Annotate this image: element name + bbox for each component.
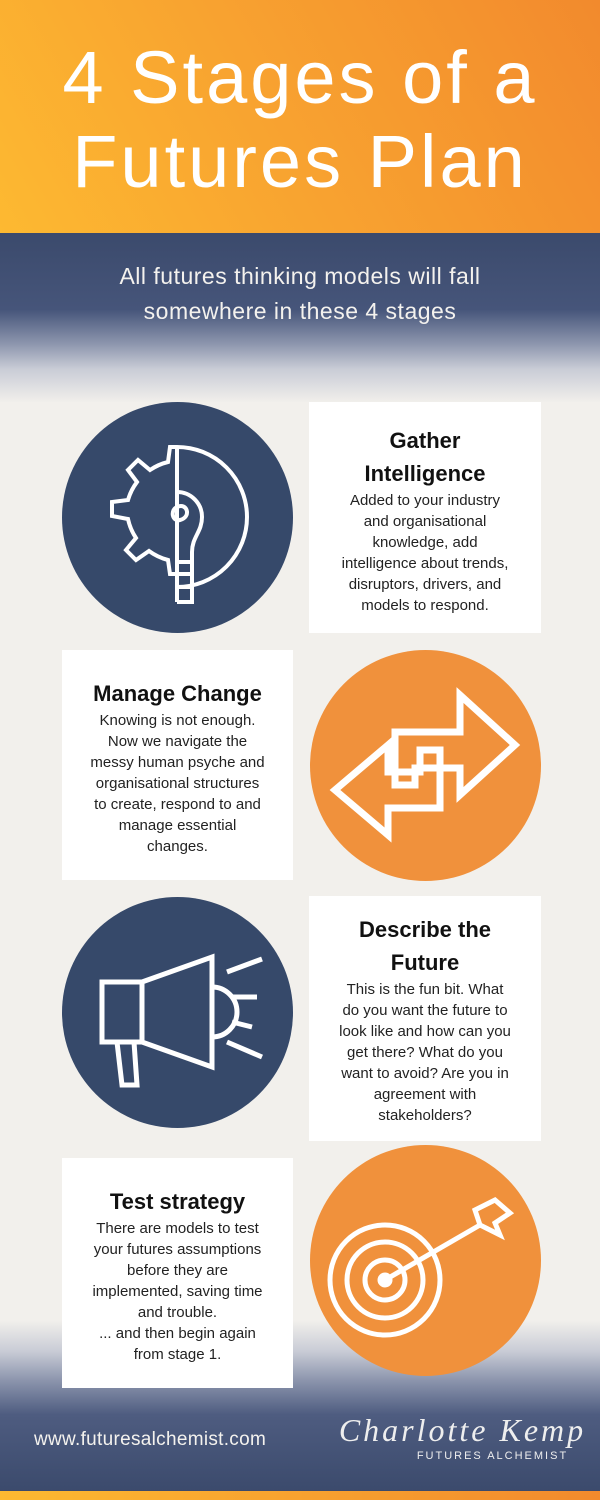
box: Describe the Future (309, 896, 541, 1141)
logo: Charlotte Kemp: FUTURES ALCHEMIST (417, 1450, 568, 1462)
box: Describe the Future: Future (391, 950, 459, 975)
box: Describe the Future: This is the fun bit. What (347, 981, 503, 998)
box: Manage Change: manage essential (119, 817, 236, 834)
circle: gear bulb icon (62, 402, 293, 633)
title (62, 36, 538, 203)
box: Manage Change: messy human psyche and (90, 754, 265, 771)
box: Describe the Future: look like and how can you (339, 1023, 511, 1040)
circle: arrows icon (310, 650, 541, 881)
box: Gather Intelligence: Gather (390, 428, 460, 453)
box: Manage Change: Now we navigate the (108, 733, 247, 750)
box: Test strategy: before they are (127, 1262, 228, 1279)
footer url: www.futuresalchemist.com (34, 1429, 266, 1450)
box: Test strategy: implemented, saving time (92, 1283, 263, 1300)
box: Test strategy: There are models to test (96, 1220, 259, 1237)
title: 4 Stages of a (62, 36, 538, 119)
box: Gather Intelligence: disruptors, drivers, and (349, 576, 501, 593)
box: Test strategy: from stage 1. (134, 1346, 221, 1363)
box: Describe the Future: do you want the future to (342, 1002, 508, 1019)
box: Describe the Future: Describe the (359, 917, 491, 942)
title: Futures Plan (72, 120, 528, 203)
box: Describe the Future: agreement with (374, 1086, 476, 1103)
subtitle: All futures thinking models will fall (119, 263, 481, 289)
box: Manage Change: to create, respond to and (94, 796, 261, 813)
box: Test strategy: Test strategy (110, 1189, 245, 1214)
box: Gather Intelligence (309, 402, 541, 633)
box: Test strategy (62, 1158, 293, 1388)
box: Describe the Future: get there? What do you (347, 1044, 503, 1061)
box: Manage Change: Knowing is not enough. (100, 712, 255, 729)
box: Test strategy: and trouble. (138, 1304, 217, 1321)
subtitle: somewhere in these 4 stages (144, 298, 456, 324)
box: Manage Change (62, 650, 293, 880)
box: Gather Intelligence: intelligence about trends, (342, 555, 508, 572)
header band (0, 0, 600, 233)
box: Manage Change: organisational structures (96, 775, 259, 792)
bottom navy band (0, 1320, 600, 1492)
box: Test strategy: your futures assumptions (94, 1241, 261, 1258)
box: Manage Change: Manage Change (93, 681, 262, 706)
box: Gather Intelligence: models to respond. (361, 597, 489, 614)
box: Test strategy: ... and then begin again (99, 1325, 256, 1342)
box: Manage Change: changes. (147, 838, 208, 855)
bottom orange strip (0, 1491, 600, 1500)
circle: megaphone icon (62, 897, 293, 1128)
box: Gather Intelligence: and organisational (364, 513, 486, 530)
box: Describe the Future: stakeholders? (378, 1107, 472, 1124)
box: Describe the Future: want to avoid? Are you in (341, 1065, 509, 1082)
box: Gather Intelligence: knowledge, add (372, 534, 478, 551)
box: Gather Intelligence: Intelligence (364, 461, 486, 486)
logo: Charlotte Kemp: Charlotte Kemp (339, 1412, 586, 1448)
box: Gather Intelligence: Added to your industry (350, 492, 500, 509)
circle: target icon (310, 1145, 541, 1376)
navy subtitle band (0, 233, 600, 403)
subtitle (119, 263, 481, 324)
